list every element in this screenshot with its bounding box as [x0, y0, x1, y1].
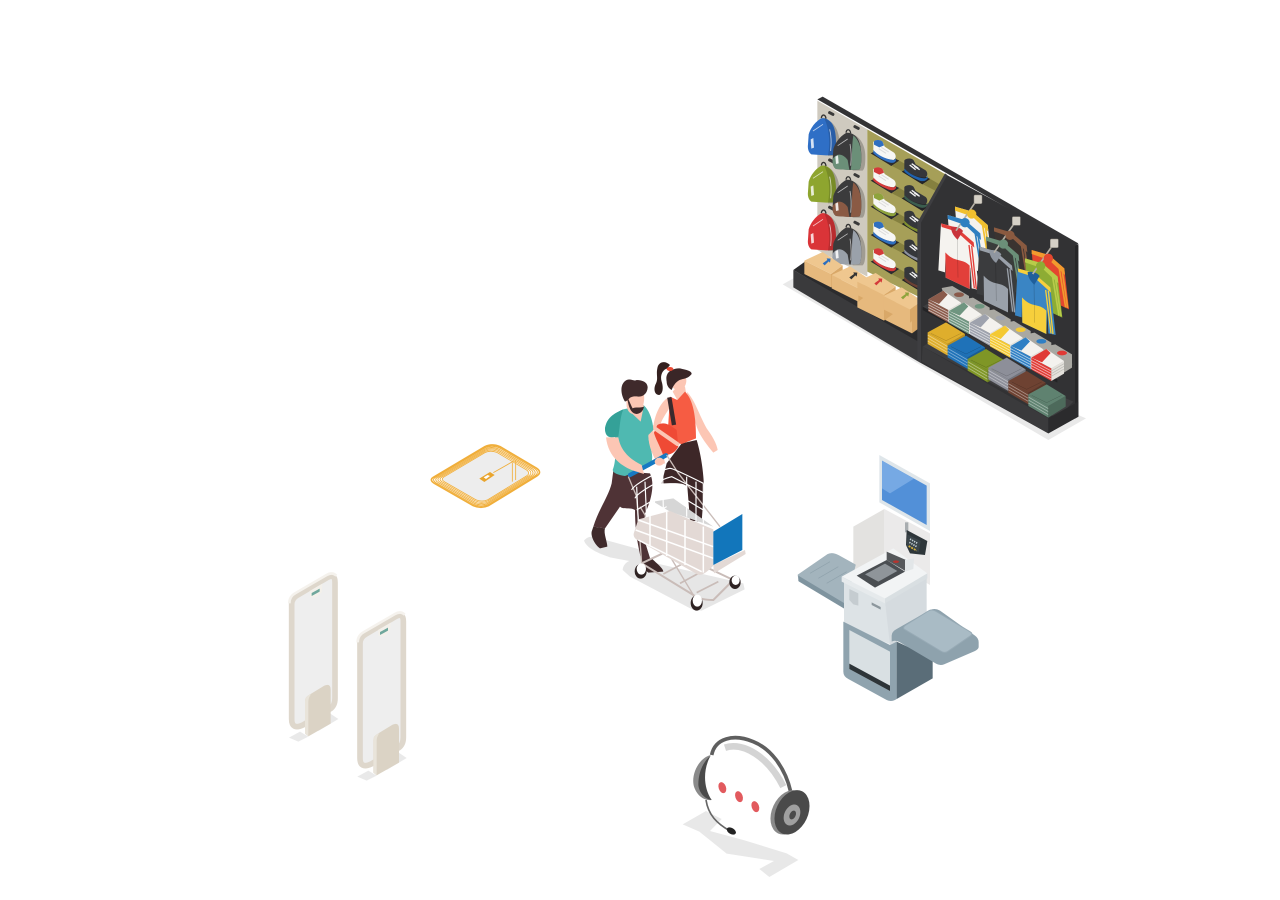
floor shadow of shelf [783, 278, 1086, 440]
right ear cup [764, 784, 816, 840]
shelf back wall [817, 97, 1078, 297]
tag antenna [431, 445, 539, 507]
dark clothing panel [917, 173, 1078, 433]
panel: couple with shopping cart [584, 362, 746, 611]
woman [650, 362, 718, 522]
left ear cup [693, 755, 712, 800]
folded stacks [928, 322, 1066, 418]
gate left [289, 573, 338, 742]
jackets on hangers [938, 195, 1069, 335]
privacy panels [853, 509, 930, 585]
platform under boxes [793, 262, 918, 362]
backpacks [808, 115, 865, 265]
panel: store shelf unit [783, 97, 1086, 440]
counter top with scanner [842, 548, 927, 603]
panel: customer support headset [683, 730, 816, 877]
right bagging tray [892, 609, 979, 665]
payment terminal [905, 522, 927, 555]
shoe boxes [804, 252, 924, 333]
cabinet body [843, 578, 933, 701]
panel: security gates [289, 573, 407, 781]
folded shirts [928, 286, 1072, 381]
gate right [357, 612, 407, 781]
headset shadow [683, 811, 798, 877]
monitor [879, 455, 930, 531]
panel: RFID tag [431, 445, 539, 507]
man [592, 380, 666, 573]
left conveyor table [798, 554, 855, 609]
headband [712, 738, 791, 792]
upper shelf [923, 301, 1073, 383]
cart shadow [584, 537, 745, 611]
tag chip [479, 461, 516, 482]
chat dots [717, 781, 761, 813]
lower shelf and base [922, 340, 1078, 433]
pegs [828, 111, 860, 226]
shopping cart [628, 455, 746, 611]
speech bubble [692, 730, 796, 847]
panel: self-checkout kiosk [798, 455, 979, 701]
microphone boom [706, 800, 737, 836]
shoes display [871, 140, 951, 303]
